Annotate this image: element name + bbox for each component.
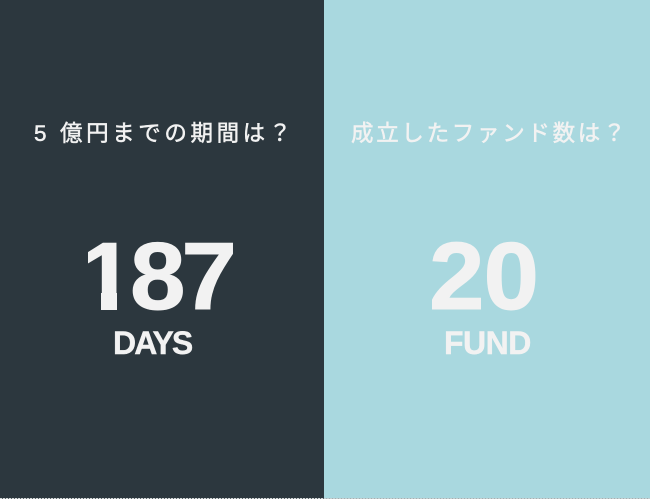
big number: 187: 1 (79, 223, 135, 330)
question heading: number of funded projects: 成立したファンド数は？ (351, 121, 628, 146)
big number: 187: 87 (130, 223, 233, 330)
unit: DAYS: DAYS (113, 325, 191, 361)
unit: FUND: FUND (444, 325, 531, 361)
question heading: period to 500 million yen: 5 億円までの期間は？ (34, 121, 295, 146)
big number: 20: 20 (429, 223, 538, 330)
panel: days to 500 million yen (0, 0, 324, 499)
panel: number of funds (324, 0, 650, 499)
